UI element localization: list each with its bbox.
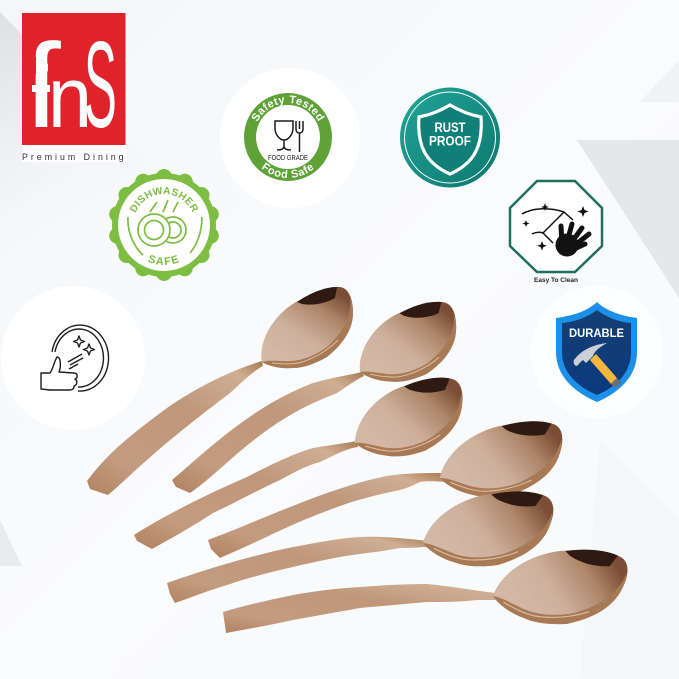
- label: food grade: FOOD GRADE: [268, 155, 308, 162]
- curved text: safe: SAFE: [148, 255, 179, 266]
- white circle: thumbs-up backdrop: [1, 286, 145, 430]
- badge: rust proof: [400, 88, 500, 188]
- white circle: food safe backdrop: [220, 68, 360, 208]
- handle: [134, 441, 358, 549]
- spoon 6: [223, 517, 636, 649]
- label: durable: DURABLE: [569, 328, 624, 340]
- bowl: [419, 464, 561, 588]
- icon: shield: [419, 105, 481, 174]
- logo tagline: Premium Dining: [22, 152, 127, 162]
- handle: [208, 473, 445, 558]
- icon: wiping hand: [522, 203, 589, 256]
- badge: durable: [556, 302, 637, 402]
- logo wordmark: S: [84, 15, 117, 153]
- icon: plates: [128, 200, 202, 255]
- logo wordmark: f: [24, 19, 62, 153]
- spoon 2: [172, 294, 458, 493]
- logo white strip: [22, 145, 127, 162]
- icon: thumbs up with clean plate: [41, 325, 109, 391]
- spoon 4: [208, 398, 569, 558]
- handle: [223, 584, 497, 633]
- brand logo: [22, 13, 127, 162]
- icon: hammer: [574, 343, 621, 388]
- badge: easy to clean: [510, 181, 602, 284]
- curved text: food safe: Food Safe: [262, 162, 314, 178]
- logo wordmark: n: [48, 49, 92, 146]
- bowl: [261, 287, 353, 368]
- icon: glass and fork: [275, 121, 303, 152]
- spoon 3: [134, 363, 467, 549]
- curved text: dishwasher: DISHWASHER: [129, 186, 198, 212]
- badge: rust proof: PROOF: [429, 134, 471, 148]
- curved text: safety tested: Safety Tested: [252, 95, 325, 122]
- logo red panel: [22, 13, 126, 145]
- white circle: durable backdrop: [531, 286, 663, 418]
- bowl: [437, 398, 569, 515]
- handle: [87, 361, 263, 495]
- badge: dishwasher safe: [109, 169, 219, 281]
- scalloped edge: [109, 169, 219, 281]
- badge: food safe: [244, 93, 332, 181]
- label: easy to clean: Easy To Clean: [534, 277, 578, 284]
- spoon 5: [167, 464, 561, 603]
- bowl: [489, 517, 636, 649]
- handle: [172, 372, 364, 493]
- spoon 1: [87, 287, 353, 495]
- handle: [167, 537, 428, 603]
- logo wordmark: [22, 15, 117, 153]
- bowl: [359, 294, 458, 388]
- bowl: [353, 363, 467, 468]
- label: rust proof: RUST: [434, 120, 466, 135]
